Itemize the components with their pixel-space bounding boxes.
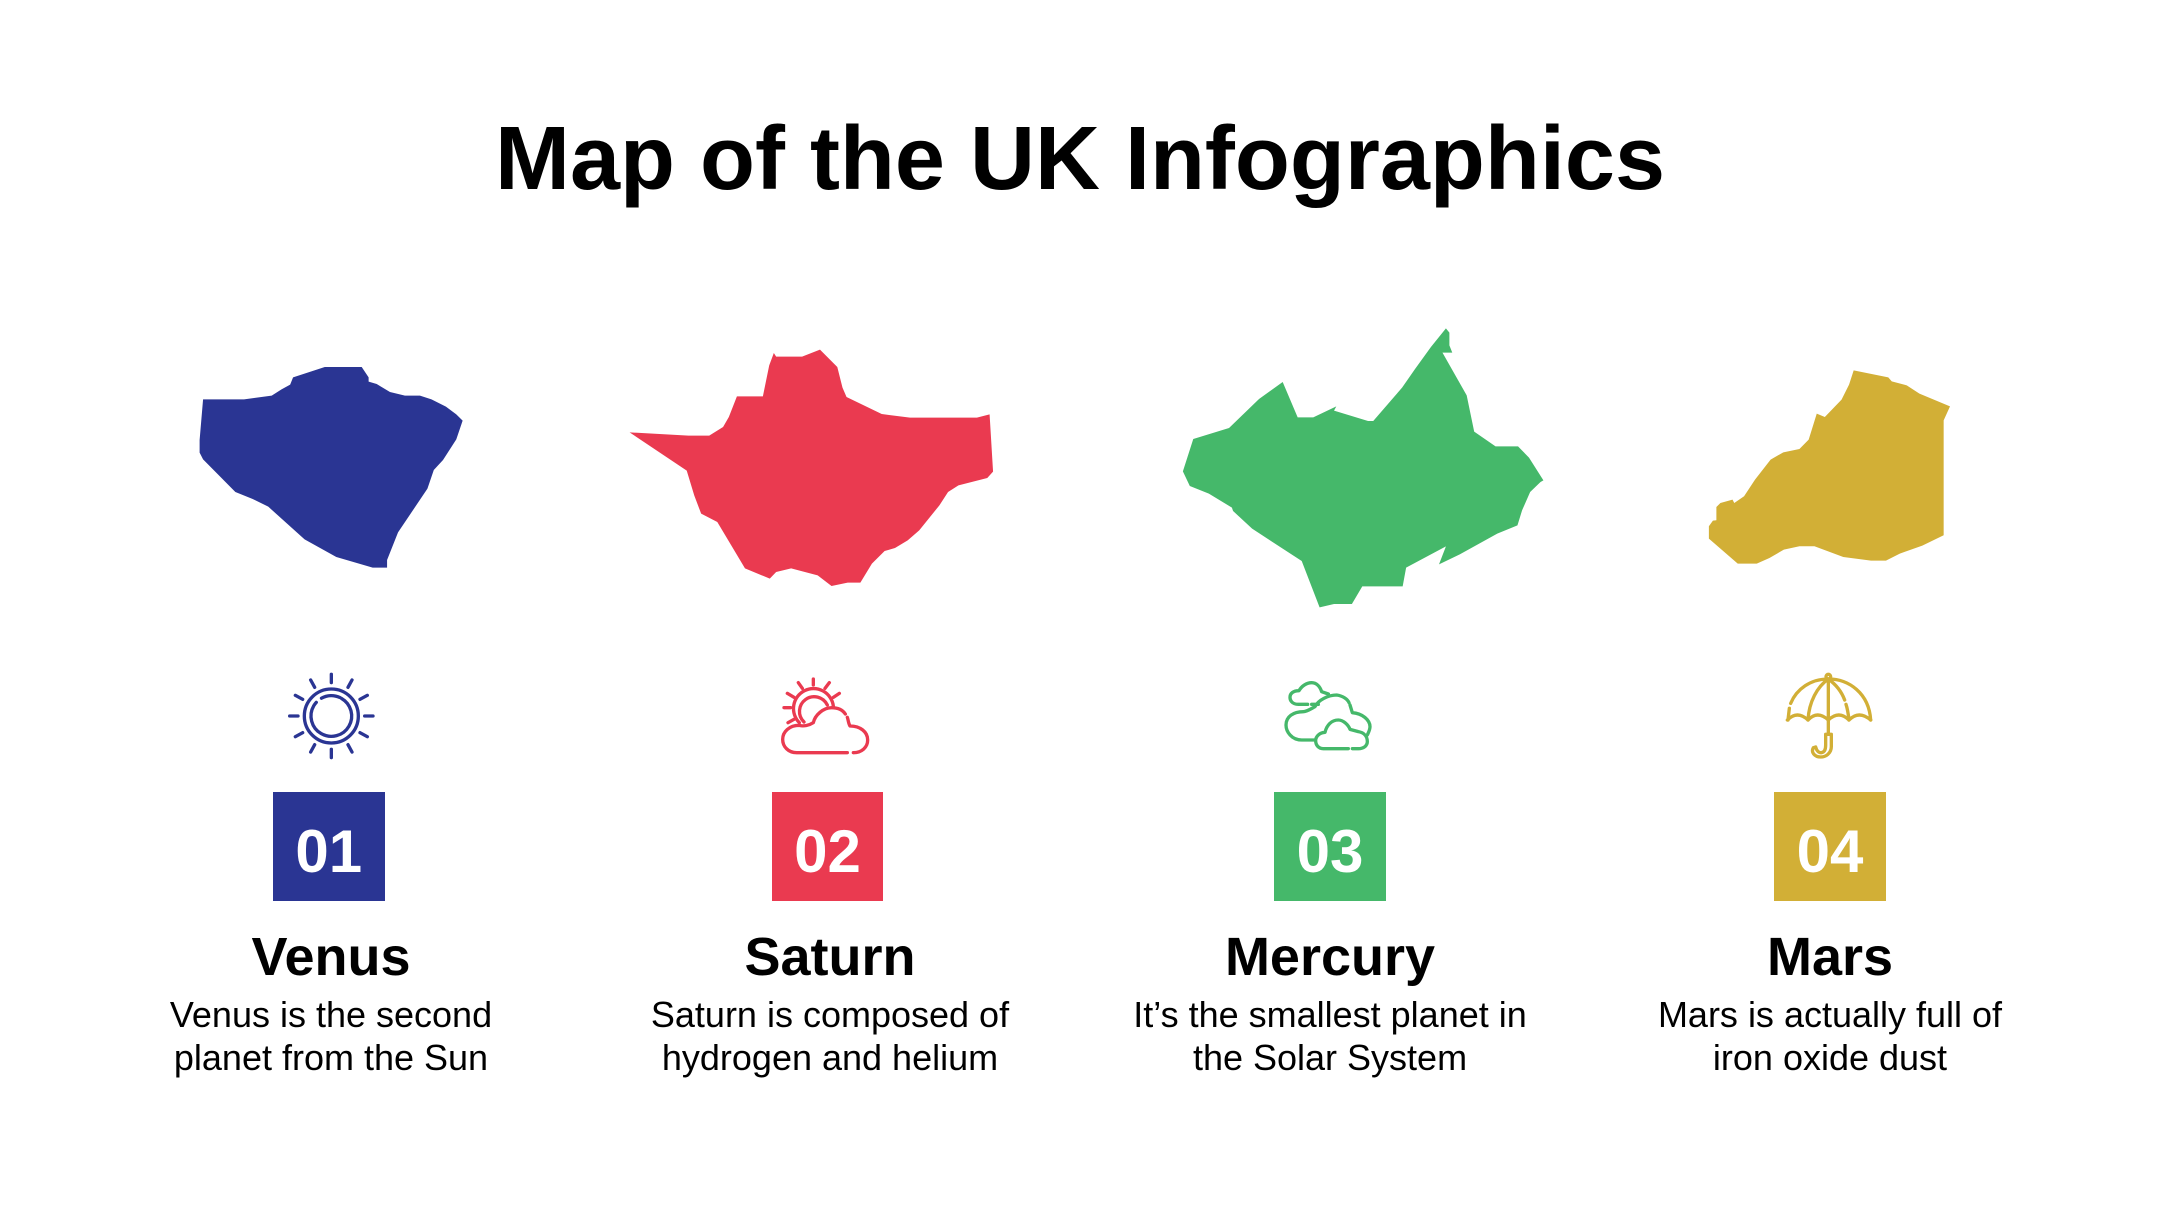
description: Venus: Venus is the second [170,994,492,1035]
description: Venus: planet from the Sun [174,1037,488,1078]
description: Mars: iron oxide dust [1713,1037,1947,1078]
icon: umbrella [1786,672,1872,759]
heading: Saturn: Saturn [744,927,916,987]
description: Saturn: Saturn is composed of [651,994,1009,1035]
description: Saturn [651,994,1010,1078]
map shape: green region [1182,328,1544,608]
number badge 03: 03 [1297,818,1363,885]
description: Venus [170,994,492,1078]
number badge 01: 01 [295,818,362,885]
icon: clouds [1284,681,1372,750]
map shape: blue region [200,367,463,568]
description: Mercury: It’s the smallest planet in [1133,994,1527,1035]
panel: Venus [170,367,492,1078]
number badge 03 [1274,792,1386,901]
title: Map of the UK Infographics [495,109,1665,209]
icon: sun behind cloud [781,677,870,754]
heading: Mars: Mars [1767,927,1893,987]
description: Saturn: hydrogen and helium [662,1037,998,1078]
map shape: red region [630,350,994,586]
number badge 01 [273,792,384,901]
map shape: gold region [1708,370,1950,564]
panel: Saturn [630,350,1010,1078]
panel: Mercury [1133,328,1544,1078]
icon: sun [288,672,375,760]
number badge 02: 02 [794,818,861,885]
description: Mercury [1133,994,1527,1078]
heading: Mercury: Mercury [1225,927,1435,987]
description: Mars [1658,994,2002,1078]
description: Mercury: the Solar System [1193,1037,1467,1078]
number badge 04 [1774,792,1886,901]
number badge 02 [772,792,883,901]
panel: Mars [1658,370,2002,1078]
number badge 04: 04 [1797,818,1863,885]
description: Mars: Mars is actually full of [1658,994,2002,1035]
heading: Venus: Venus [251,927,411,987]
